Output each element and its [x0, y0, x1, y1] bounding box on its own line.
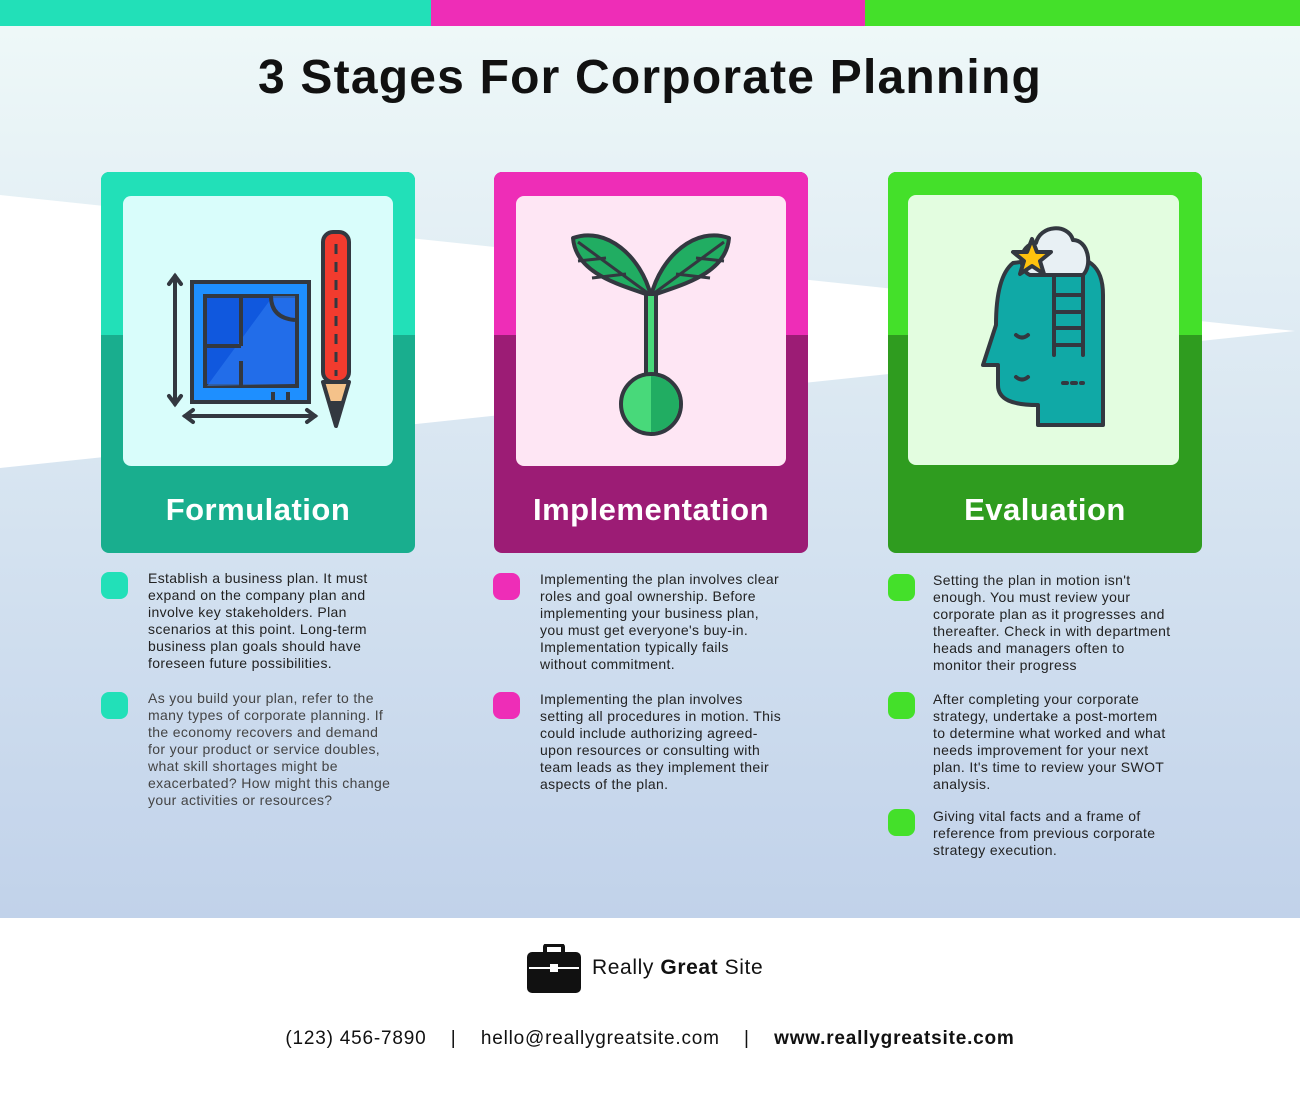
bullets: evaluation: Setting the plan in motion isn't [933, 572, 1131, 588]
bullets: evaluation: Giving vital facts and a frame of [933, 808, 1141, 824]
footer [0, 918, 1300, 1100]
bullets: implementation: setting all procedures in motion. This [540, 708, 781, 724]
icon: head with ladder [980, 226, 1105, 427]
heading: Implementation [533, 492, 769, 527]
bullets: formulation: for your product or service doubles, [148, 741, 380, 757]
bullets: implementation: could include authorizing agreed- [540, 725, 758, 741]
contact line: (123) 456-7890 | hello@reallygreatsite.com | www.reallygreatsite.com [285, 1028, 1015, 1049]
top color bar [0, 0, 1300, 26]
bullets: implementation: Implementing the plan involves [540, 691, 743, 707]
bullets: evaluation: analysis. [933, 776, 991, 792]
bullets: formulation: exacerbated? How might this change [148, 775, 390, 791]
bullets: evaluation: strategy execution. [933, 842, 1057, 858]
bullets: evaluation: After completing your corporate [933, 691, 1139, 707]
heading: Evaluation [964, 492, 1126, 527]
icon: blueprint and pencil [166, 230, 351, 428]
bullets: formulation: expand on the company plan and [148, 587, 366, 603]
heading: Formulation [166, 492, 350, 527]
bullets: formulation: As you build your plan, refer to the [148, 690, 374, 706]
bullets: formulation: many types of corporate planning. If [148, 707, 383, 723]
bullets: formulation: the economy recovers and demand [148, 724, 378, 740]
bullets: implementation: you must get everyone's buy-in. [540, 622, 748, 638]
bullets: evaluation: monitor their progress [933, 657, 1077, 673]
bullets: evaluation: heads and managers often to [933, 640, 1125, 656]
bullets: formulation: foreseen future possibilities. [148, 655, 332, 671]
bullets: evaluation [888, 572, 1170, 858]
panel: formulation [101, 172, 415, 553]
bullets: implementation: implementing your business plan, [540, 605, 759, 621]
icon: briefcase [527, 944, 581, 993]
bullets: evaluation: to determine what worked and what [933, 725, 1166, 741]
bullets: formulation: what skill shortages might be [148, 758, 338, 774]
bullets: formulation: your activities or resources? [148, 792, 332, 808]
bullets: implementation: without commitment. [540, 656, 675, 672]
panel: implementation [494, 172, 808, 553]
bullets: evaluation: enough. You must review your [933, 589, 1130, 605]
bullets: formulation: business plan goals should have [148, 638, 361, 654]
panel: evaluation [888, 172, 1202, 553]
title: 3 Stages For Corporate Planning [258, 51, 1042, 104]
bullets: formulation: Establish a business plan. It must [148, 570, 368, 586]
bullets: evaluation: thereafter. Check in with department [933, 623, 1170, 639]
bullets: implementation [493, 571, 781, 792]
bullets: formulation: involve key stakeholders. Plan [148, 604, 347, 620]
bullets: implementation: Implementation typically fails [540, 639, 729, 655]
bullets: implementation: roles and goal ownership. Before [540, 588, 756, 604]
brand name: Really Great Site [592, 956, 763, 979]
bullets: implementation: Implementing the plan involves clear [540, 571, 779, 587]
bullets: formulation [101, 570, 390, 808]
bullets: evaluation: plan. It's time to review your SWOT [933, 759, 1164, 775]
bullets: implementation: upon resources or consulting with [540, 742, 760, 758]
bullets: evaluation: corporate plan as it progresses and [933, 606, 1165, 622]
bullets: evaluation: reference from previous corporate [933, 825, 1155, 841]
bullets: evaluation: needs improvement for your next [933, 742, 1149, 758]
icon: sprout [571, 233, 731, 436]
bullets: implementation: aspects of the plan. [540, 776, 668, 792]
bullets: evaluation: strategy, undertake a post-mortem [933, 708, 1158, 724]
bullets: implementation: team leads as they implement their [540, 759, 769, 775]
bullets: formulation: scenarios at this point. Long-term [148, 621, 367, 637]
